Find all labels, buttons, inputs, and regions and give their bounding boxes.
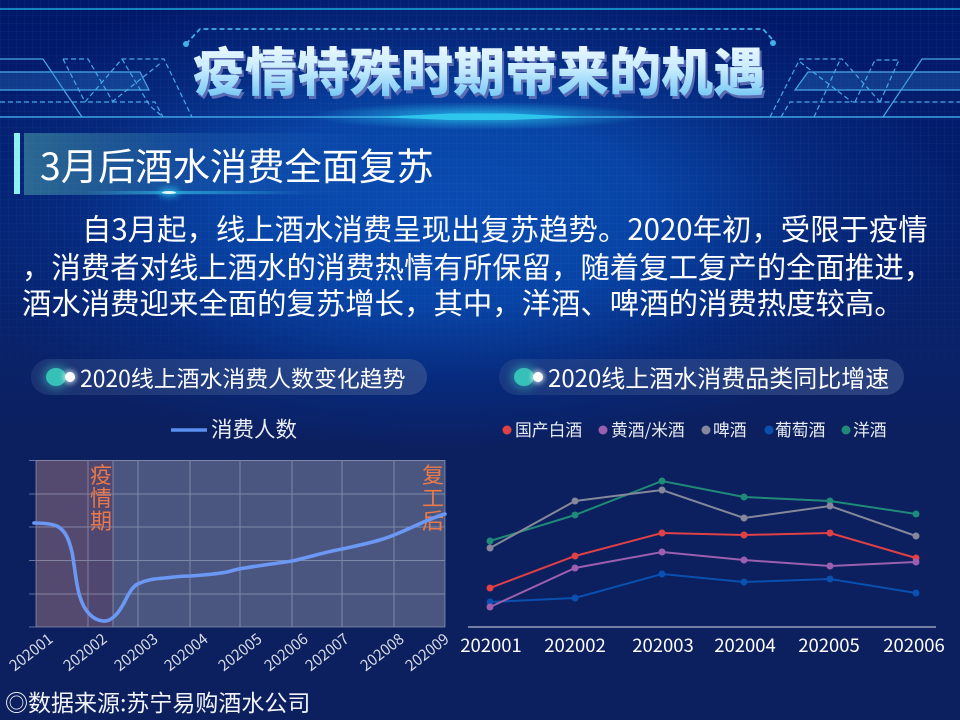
x axis labels: 202004 (714, 632, 776, 658)
annotation: epidemic period: 疫 (90, 458, 112, 490)
series: wine (486, 570, 920, 606)
body paragraph (22, 207, 933, 323)
heading text: 3月后酒水消费全面复苏 (40, 137, 434, 191)
x axis labels (5, 628, 453, 676)
legend: 啤酒 (713, 417, 747, 441)
x axis labels (460, 632, 945, 658)
series: baijiu (486, 530, 920, 592)
x axis labels: 202005 (798, 632, 860, 658)
x axis labels: 202001 (5, 628, 57, 676)
x axis labels: 202005 (214, 628, 266, 676)
annotation: epidemic period (90, 458, 112, 536)
x axis labels: 202008 (356, 628, 408, 676)
x axis labels: 202003 (632, 632, 694, 658)
grid (29, 460, 445, 627)
shaded periods (36, 460, 445, 627)
x axis labels: 202001 (460, 632, 522, 658)
x axis labels: 202003 (110, 628, 162, 676)
trend line (34, 514, 445, 621)
x axis labels: 202006 (260, 628, 312, 676)
accent bar (14, 133, 20, 194)
body paragraph: 酒水消费迎来全面的复苏增长，其中，洋酒、啤酒的消费热度较高。 (22, 281, 904, 323)
series: beer (486, 486, 920, 552)
legend: 黄酒/米酒 (611, 417, 685, 441)
x axis labels: 202002 (544, 632, 606, 658)
title dashed frame (183, 29, 776, 47)
x axis labels: 202007 (301, 628, 353, 676)
panel: line chart title: 2020线上酒水消费人数变化趋势 (80, 360, 406, 394)
source note: ◎数据来源:苏宁易购酒水公司 (5, 684, 310, 718)
x axis labels: 202009 (401, 628, 453, 676)
annotation: back to work: 复 (422, 458, 444, 490)
annotation: back to work: 后 (422, 504, 444, 536)
heading band (24, 133, 364, 195)
icon: toggle glow (39, 360, 80, 394)
header decoration (0, 8, 960, 129)
panel: category chart title: 2020线上酒水消费品类同比增速 (548, 359, 889, 394)
series: rice wine (486, 548, 920, 610)
icon: toggle glow (507, 361, 548, 394)
body paragraph: ，消费者对线上酒水的消费热情有所保留，随着复工复产的全面推进， (22, 245, 933, 287)
legend (171, 413, 297, 444)
series: imported spirits (486, 478, 920, 544)
annotation: back to work (422, 458, 444, 536)
annotation: epidemic period: 情 (90, 481, 112, 513)
body paragraph: 自3月起，线上酒水消费呈现出复苏趋势。2020年初，受限于疫情 (82, 207, 928, 249)
chart: consumers trend (5, 415, 453, 676)
section heading (14, 133, 434, 202)
legend: 葡萄酒 (775, 417, 826, 441)
x axis labels: 202004 (160, 628, 212, 676)
annotation: back to work: 工 (422, 481, 444, 513)
legend: 洋酒 (853, 417, 887, 441)
annotation: epidemic period: 期 (90, 504, 112, 536)
x axis labels: 202002 (59, 628, 111, 676)
chart: category growth (460, 417, 945, 658)
legend (502, 417, 887, 441)
legend: 国产白酒 (515, 417, 582, 441)
heading glow (84, 191, 304, 194)
x axis labels: 202006 (883, 632, 945, 658)
